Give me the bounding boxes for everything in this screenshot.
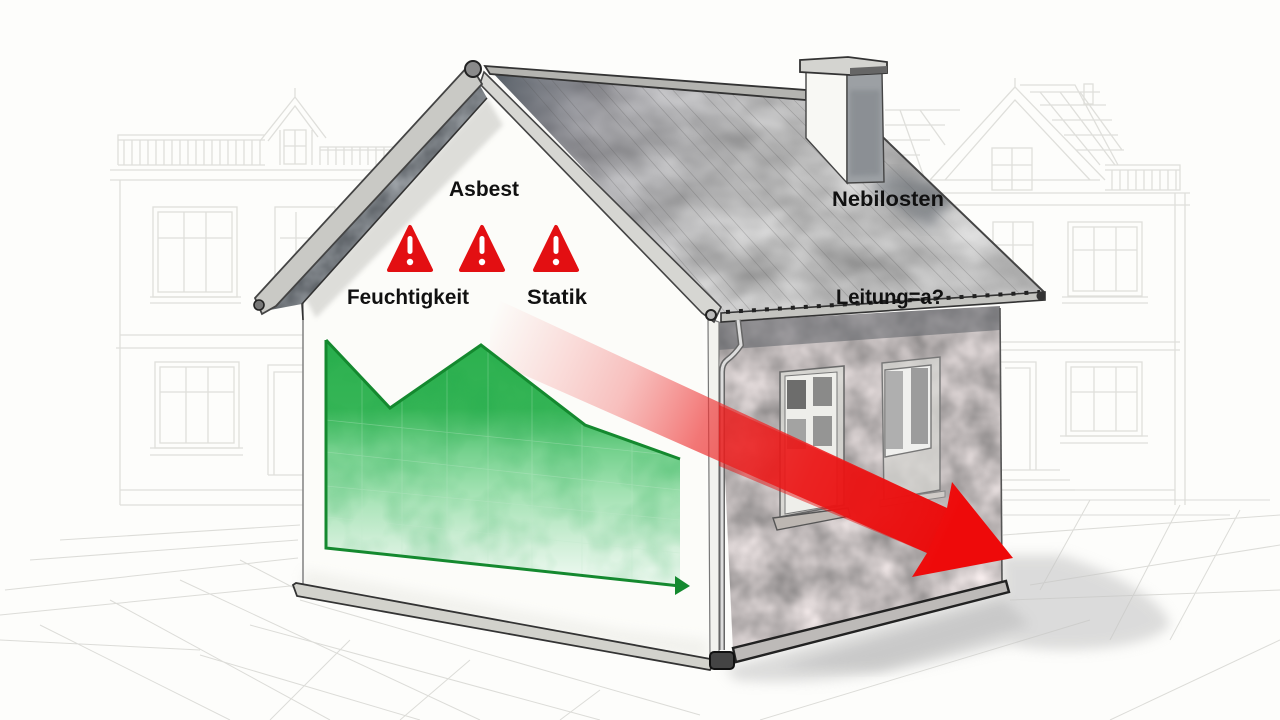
right gable board (480, 72, 721, 322)
label: Leitungen: Leitung=a? (836, 286, 944, 309)
side wall (720, 306, 1002, 647)
eave gutter (721, 292, 1045, 322)
front wall (303, 98, 710, 662)
label: Asbest: Asbest (449, 178, 519, 201)
label: Feuchtigkeit: Feuchtigkeit (347, 286, 469, 309)
window left (773, 366, 850, 530)
axis arrowhead (675, 576, 690, 595)
area (326, 340, 680, 586)
warning icon: Statik (535, 227, 577, 270)
downpipe (722, 320, 741, 650)
ground shadow (725, 555, 1170, 682)
chimney (800, 57, 887, 183)
ground grid (0, 500, 1280, 720)
label: Nebenkosten: Nebilosten (832, 188, 944, 211)
background house right (885, 78, 1190, 505)
axes (326, 340, 680, 586)
warning icon: Asbest (461, 227, 503, 270)
arrow shaft over side wall (719, 405, 947, 553)
background house left (110, 88, 410, 505)
ridge (485, 66, 806, 100)
roof side (494, 75, 1042, 312)
red arrow (490, 296, 1013, 577)
label: Statik: Statik (527, 286, 587, 309)
wall corner pilaster (708, 318, 719, 660)
left gable board (255, 64, 482, 314)
green chart (320, 335, 690, 595)
gable soffit (265, 78, 503, 320)
foundation ledge (293, 581, 1009, 670)
window right (880, 357, 945, 507)
house (254, 57, 1050, 670)
trend line (326, 340, 680, 459)
warning icon: Feuchtigkeit (389, 227, 431, 270)
